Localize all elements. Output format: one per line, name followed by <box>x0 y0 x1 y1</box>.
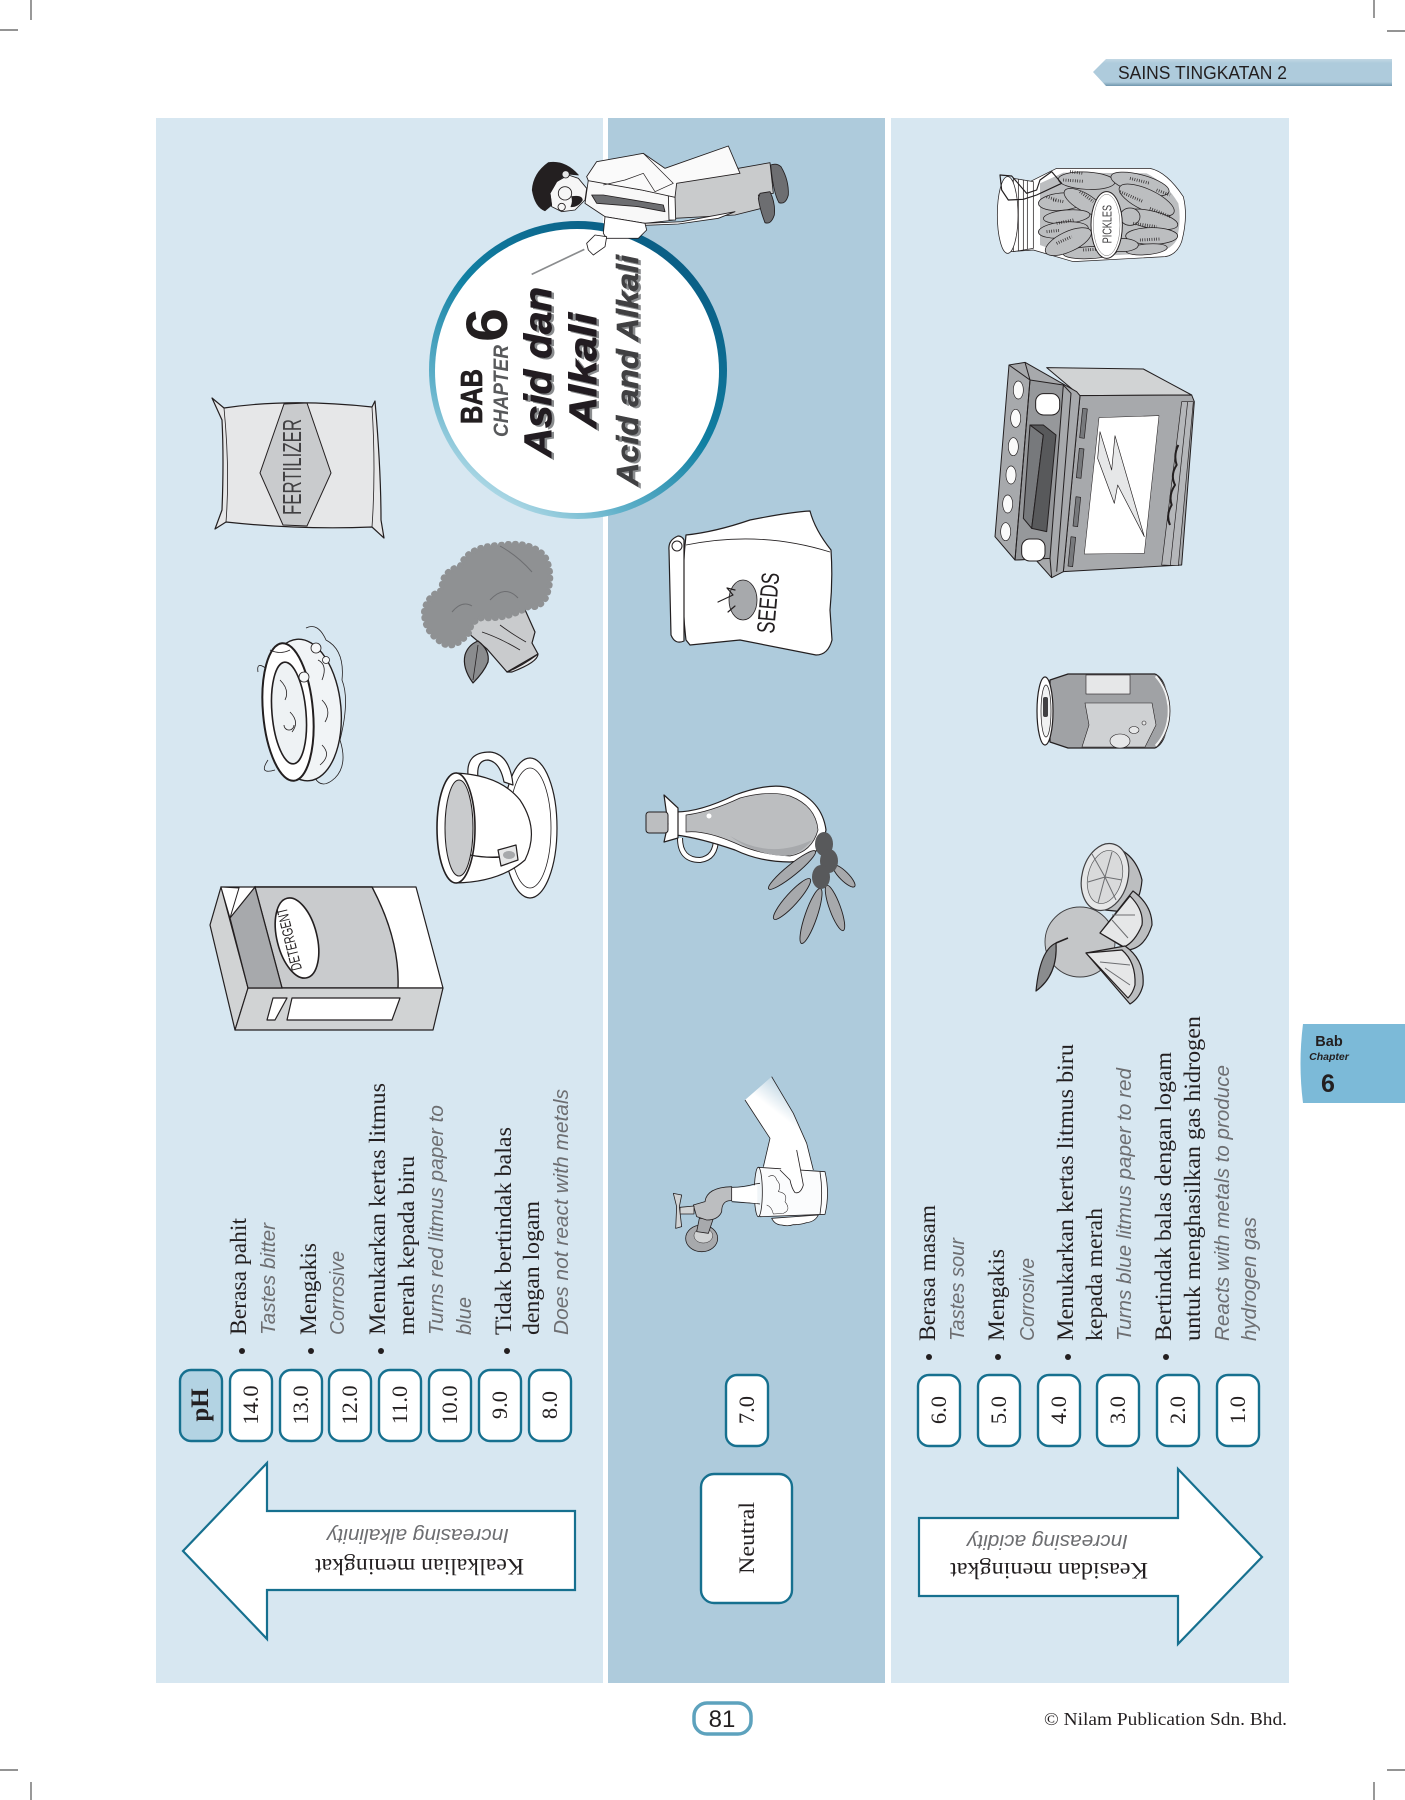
arrow: increasing alkalinity <box>183 1463 575 1639</box>
pH 9.0: 9.0 <box>487 1391 512 1419</box>
pH 7.0 <box>726 1375 768 1446</box>
acid properties text: Menukarkan kertas litmus biru <box>1053 1044 1079 1341</box>
illustration: tap and hand holding glass <box>673 1077 827 1252</box>
acid properties text: Reacts with metals to produce <box>1211 1065 1234 1341</box>
alkali properties text: Mengakis <box>296 1243 322 1335</box>
pH 12.0: 12.0 <box>337 1385 362 1425</box>
arrow: increasing alkalinity: Kealkalian meningkat <box>315 1553 524 1579</box>
badge ring <box>429 221 727 519</box>
chapter side tab <box>1300 1024 1405 1103</box>
panel: neutral background <box>608 118 885 1683</box>
neutral label: Neutral <box>734 1502 759 1574</box>
illustration: detergent box: DETERGENT <box>274 906 306 972</box>
pH 9.0 <box>479 1370 521 1441</box>
title: Asid dan Alkali <box>518 287 605 458</box>
illustration: detergent box <box>210 887 443 1030</box>
illustration: olive oil bottle <box>646 786 858 945</box>
alkali properties text: dengan logam <box>519 1201 545 1335</box>
illustration: soap bar <box>257 626 347 784</box>
pH 13.0: 13.0 <box>288 1385 313 1425</box>
page number <box>694 1703 751 1734</box>
pH 1.0 <box>1217 1375 1259 1446</box>
illustration: microwave oven <box>995 362 1194 578</box>
illustration: seeds packet: SEEDS <box>752 571 785 635</box>
pH header: pH <box>187 1388 214 1422</box>
header tab: SAINS TINGKATAN 2 <box>1093 59 1392 86</box>
pH scale: alkali <box>180 1370 571 1441</box>
panel: acid background <box>891 118 1289 1683</box>
acid properties text: Bertindak balas dengan logam <box>1151 1052 1177 1341</box>
pH 6.0: 6.0 <box>926 1396 951 1424</box>
chapter number: 6 <box>455 308 520 342</box>
alkali properties text: Menukarkan kertas litmus <box>365 1083 391 1335</box>
pH 14.0 <box>230 1370 272 1441</box>
illustration: fertilizer bag <box>212 398 384 538</box>
acid properties text: Mengakis <box>984 1249 1010 1341</box>
acid properties text: kepada merah <box>1082 1208 1108 1341</box>
chapter side tab: Bab <box>1315 1034 1343 1050</box>
label BAB: BAB <box>454 369 489 424</box>
acid properties text: Tastes sour <box>946 1237 969 1341</box>
chapter side tab: Chapter <box>1309 1051 1350 1063</box>
pH 8.0 <box>529 1370 571 1441</box>
pH 2.0: 2.0 <box>1165 1396 1190 1424</box>
illustration: soda can <box>1037 674 1170 748</box>
acid properties text: untuk menghasilkan gas hidrogen <box>1180 1016 1206 1341</box>
title: Asid dan Alkali: Alkali <box>563 311 605 429</box>
header tab: SAINS TINGKATAN 2: SAINS TINGKATAN 2 <box>1118 62 1287 83</box>
pH 5.0: 5.0 <box>986 1396 1011 1424</box>
illustration: pickle jar <box>997 167 1185 262</box>
chapter side tab: 6 <box>1321 1070 1335 1098</box>
alkali properties text: Tidak bertindak balas <box>491 1127 517 1335</box>
pH 3.0: 3.0 <box>1105 1396 1130 1424</box>
badge disc <box>435 229 719 513</box>
illustration: pickle jar: PICKLES <box>1101 205 1115 243</box>
label CHAPTER: CHAPTER <box>490 344 513 437</box>
acid properties text: Turns blue litmus paper to red <box>1113 1067 1136 1341</box>
acid properties text <box>915 1016 1261 1360</box>
page number: 81 <box>709 1706 735 1733</box>
neutral label <box>701 1474 792 1603</box>
pH header <box>180 1370 222 1441</box>
alkali properties text: Turns red litmus paper to <box>425 1105 448 1335</box>
illustration: citrus fruits <box>1036 838 1152 1004</box>
arrow: increasing acidity: Keasidan meningkat <box>950 1557 1148 1583</box>
pH 8.0: 8.0 <box>537 1391 562 1419</box>
arrow: increasing alkalinity: Increasing alkalinity <box>326 1524 509 1546</box>
illustration: fertilizer bag: FERTILIZER <box>277 419 307 515</box>
pH 1.0: 1.0 <box>1225 1396 1250 1424</box>
subtitle: Acid and Alkali: Acid and Alkali <box>610 254 645 487</box>
pH 4.0: 4.0 <box>1046 1396 1071 1424</box>
title: Asid dan Alkali: Asid dan <box>518 287 560 458</box>
acid properties text: hydrogen gas <box>1238 1217 1261 1341</box>
alkali properties text <box>226 1083 573 1354</box>
alkali properties text: Tastes bitter <box>257 1222 280 1335</box>
copyright: © Nilam Publication Sdn. Bhd. <box>1044 1709 1287 1729</box>
illustration: seeds packet <box>669 511 832 655</box>
pH 10.0: 10.0 <box>437 1385 462 1425</box>
pH 11.0: 11.0 <box>387 1386 412 1424</box>
pH 2.0 <box>1157 1375 1199 1446</box>
alkali properties text: blue <box>453 1297 476 1335</box>
pH 14.0: 14.0 <box>238 1385 263 1425</box>
pH 12.0 <box>329 1370 371 1441</box>
arrow: increasing acidity: Increasing acidity <box>966 1530 1128 1552</box>
pH 7.0: 7.0 <box>734 1396 759 1424</box>
acid properties text: Berasa masam <box>915 1205 941 1341</box>
illustration: broccoli <box>424 544 550 683</box>
pH 11.0 <box>379 1370 421 1441</box>
panel: alkali background <box>156 118 603 1683</box>
pH 6.0 <box>918 1375 960 1446</box>
alkali properties text: Does not react with metals <box>550 1089 573 1335</box>
pH 5.0 <box>978 1375 1020 1446</box>
alkali properties text: merah kepada biru <box>394 1156 420 1335</box>
pH 13.0 <box>280 1370 322 1441</box>
acid properties text: Corrosive <box>1016 1258 1039 1341</box>
arrow: increasing acidity <box>919 1469 1262 1644</box>
illustration: tea cup <box>437 752 557 898</box>
chapter badge <box>429 221 727 519</box>
alkali properties text: Corrosive <box>326 1251 349 1335</box>
pH 10.0 <box>429 1370 471 1441</box>
alkali properties text: Berasa pahit <box>226 1218 252 1335</box>
pH 3.0 <box>1097 1375 1139 1446</box>
illustration: scientist with pointer <box>532 146 788 274</box>
pH 4.0 <box>1038 1375 1080 1446</box>
pH scale: acid <box>918 1375 1259 1446</box>
